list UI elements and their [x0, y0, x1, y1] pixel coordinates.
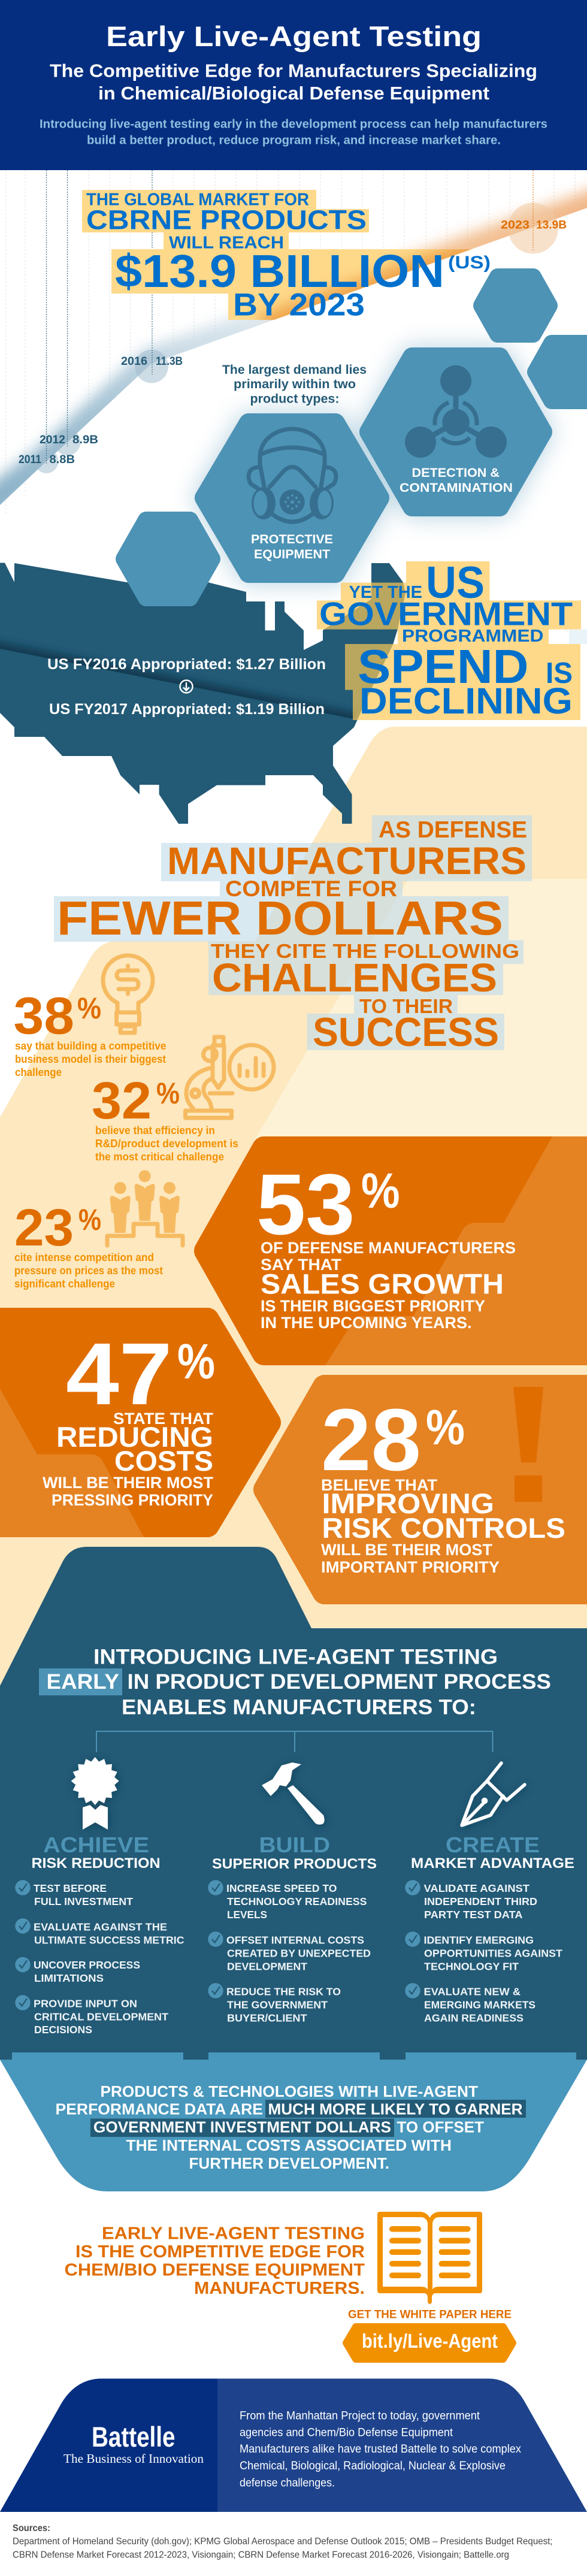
- headline: US government spend declining: US: [426, 557, 485, 607]
- panel: investment callout: [0, 2052, 587, 2191]
- headline: defense manufacturers challenges: COMPETE FOR: [225, 876, 397, 901]
- icon: exclamation mark: [513, 1387, 543, 1502]
- label: DETECTION &: [412, 465, 500, 480]
- checklist: AGAIN READINESS: [424, 2012, 524, 2024]
- panel: 28 percent risk controls: BELIEVE THAT: [321, 1476, 438, 1494]
- stat: 38 percent: [13, 956, 167, 1078]
- headline: global market: WILL REACH: [169, 234, 284, 253]
- checklist: DECISIONS: [34, 2024, 92, 2036]
- icon: microscope: [186, 1037, 274, 1118]
- about text: Chemical, Biological, Radiological, Nuclear & Explosive: [240, 2460, 506, 2472]
- column: create: MARKET ADVANTAGE: [411, 1855, 574, 1871]
- intro text: Introducing live-agent testing early in the development process can help manufacturers: [40, 117, 547, 131]
- checklist: OFFSET INTERNAL COSTS: [226, 1934, 364, 1946]
- panel: 53 percent sales growth: IS THEIR BIGGEST PRIORITY: [261, 1297, 485, 1315]
- hexagon: decorative top right: [482, 277, 549, 334]
- caption: pressure on prices as the most: [14, 1265, 163, 1277]
- column heading: BUILD: [259, 1833, 330, 1857]
- label: PROTECTIVE: [251, 532, 333, 546]
- headline: US government spend declining: DECLINING: [359, 681, 573, 721]
- checklist: THE GOVERNMENT: [227, 1998, 328, 2010]
- logo: Battelle: The Business of Innovation: [63, 2451, 204, 2466]
- chart: CBRNE market growth: [0, 170, 587, 515]
- sources: CBRN Defense Market Forecast 2012-2023, Visiongain; CBRN Defense Market Forecast 2016-2026, Visiongain; Battelle.org: [13, 2550, 509, 2560]
- caption: say that building a competitive: [15, 1040, 167, 1052]
- icon: chemical hazard: [405, 365, 507, 458]
- stat: 32 percent: [92, 1037, 274, 1163]
- headline: US government spend declining: YET THE: [349, 583, 422, 602]
- panel: investment callout: PRODUCTS & TECHNOLOGIES WITH LIVE-AGENT: [101, 2082, 478, 2100]
- stat: 23 percent: [14, 1170, 183, 1290]
- call to action text: [65, 2224, 365, 2298]
- headline: US government spend declining: [317, 557, 587, 721]
- headline: global market: THE GLOBAL MARKET FOR: [86, 191, 309, 210]
- panel: 53 percent sales growth: SAY THAT: [261, 1256, 342, 1274]
- column: achieve: RISK REDUCTION: [31, 1855, 161, 1871]
- icon: pen nib: [462, 1763, 525, 1825]
- call to action text: MANUFACTURERS.: [194, 2279, 365, 2298]
- headline: US government spend declining: GOVERNMENT: [319, 595, 573, 633]
- checklist: DEVELOPMENT: [227, 1960, 307, 1972]
- checklist: FULL INVESTMENT: [34, 1895, 133, 1907]
- data point 2011: 8.8B: [49, 453, 75, 466]
- heading: [39, 1645, 551, 1719]
- about text: From the Manhattan Project to today, government: [240, 2409, 480, 2423]
- panel: 47 percent reducing costs: PRESSING PRIORITY: [52, 1491, 213, 1509]
- panel: 53 percent sales growth: SALES GROWTH: [261, 1268, 504, 1300]
- budget FY2016: US FY2016 Appropriated: $1.27 Billion: [47, 656, 326, 673]
- checklist: OPPORTUNITIES AGAINST: [424, 1947, 562, 1959]
- caption: [14, 1251, 163, 1290]
- checklist: [15, 1880, 184, 2036]
- panel: investment callout: THE INTERNAL COSTS ASSOCIATED WITH: [126, 2136, 452, 2154]
- about text: Manufacturers alike have trusted Battelle to solve complex: [240, 2443, 521, 2456]
- data point 2011: [19, 170, 75, 473]
- logo: Battelle: [63, 2421, 204, 2466]
- about text: defense challenges.: [240, 2477, 335, 2490]
- panel: investment callout: TO OFFSET: [397, 2118, 484, 2136]
- hexagon: protective equipment: EQUIPMENT: [254, 547, 330, 561]
- text: largest demand: product types:: [250, 392, 339, 406]
- caption: R&D/product development is: [95, 1138, 238, 1150]
- panel: introducing live-agent testing: [0, 1547, 587, 2060]
- headline: defense manufacturers challenges: CHALLENGES: [212, 956, 497, 1000]
- background: tan panels: [0, 727, 587, 1695]
- map: United States: [0, 563, 406, 824]
- stat: 32 percent: 32: [92, 1072, 152, 1130]
- panel: investment callout: MUCH MORE LIKELY TO GARNER: [268, 2100, 523, 2118]
- panel: 47 percent reducing costs: COSTS: [114, 1445, 213, 1477]
- headline: defense manufacturers challenges: MANUFACTURERS: [167, 839, 527, 882]
- stat: 23 percent: %: [78, 1203, 101, 1236]
- subtitle: [50, 60, 537, 104]
- stat: 38 percent: 38: [13, 987, 74, 1045]
- panel: 28 percent risk controls: IMPROVING: [322, 1487, 494, 1519]
- checklist: TECHNOLOGY READINESS: [227, 1895, 367, 1907]
- panel: 53 percent sales growth: 53: [256, 1156, 355, 1253]
- heading: EARLY: [47, 1670, 119, 1694]
- data point 2023: 2023: [501, 219, 529, 231]
- data point 2012: 2012: [40, 434, 65, 446]
- headline: global market: BY 2023: [233, 288, 365, 322]
- logo: Battelle: Battelle: [92, 2421, 175, 2453]
- panel: investment callout: GOVERNMENT INVESTMENT DOLLARS: [93, 2118, 391, 2136]
- text: largest demand: [222, 363, 367, 406]
- panel: 28 percent risk controls: %: [426, 1399, 465, 1455]
- checklist: REDUCE THE RISK TO: [226, 1985, 341, 1997]
- hexagon: decorative right: [535, 343, 587, 401]
- hexagon: detection and contamination: CONTAMINATION: [400, 480, 513, 495]
- checklist: EVALUATE AGAINST THE: [34, 1921, 167, 1933]
- panel: 47 percent reducing costs: WILL BE THEIR MOST: [43, 1474, 213, 1492]
- headline: global market: [82, 190, 490, 320]
- checklist: INDEPENDENT THIRD: [424, 1895, 537, 1907]
- call to action text: EARLY LIVE-AGENT TESTING: [102, 2224, 365, 2243]
- headline: US government spend declining: IS: [546, 657, 573, 690]
- checklist: TEST BEFORE: [34, 1882, 107, 1894]
- sources: [13, 2523, 552, 2560]
- heading: IN PRODUCT DEVELOPMENT PROCESS: [127, 1670, 551, 1694]
- button: white paper link: [346, 2327, 513, 2359]
- checklist: PARTY TEST DATA: [424, 1909, 523, 1921]
- heading: INTRODUCING LIVE-AGENT TESTING: [93, 1645, 498, 1669]
- data point 2016: 11.3B: [156, 355, 183, 368]
- panel: 47 percent reducing costs: %: [177, 1334, 215, 1389]
- headline: defense manufacturers challenges: TO THEIR: [359, 995, 453, 1017]
- intro text: [40, 117, 547, 147]
- caption: business model is their biggest: [15, 1053, 166, 1065]
- checklist: LIMITATIONS: [34, 1972, 104, 1984]
- about text: agencies and Chem/Bio Defense Equipment: [240, 2426, 453, 2439]
- checklist: BUYER/CLIENT: [227, 2012, 307, 2024]
- stat: 38 percent: %: [77, 991, 101, 1025]
- text: largest demand: The largest demand lies: [222, 363, 367, 377]
- about text: [240, 2409, 521, 2490]
- headline: defense manufacturers challenges: FEWER DOLLARS: [57, 891, 503, 945]
- hexagon: detection and contamination: [369, 357, 543, 507]
- checklist: UNCOVER PROCESS: [34, 1959, 140, 1971]
- sources: Sources:: [13, 2523, 50, 2533]
- column: create: [405, 1763, 574, 2024]
- checklist: EMERGING MARKETS: [424, 1998, 535, 2010]
- icon: hammer: [262, 1762, 325, 1825]
- panel: 28 percent risk controls: 28: [321, 1391, 421, 1489]
- stat: 23 percent: 23: [14, 1199, 74, 1257]
- headline: defense manufacturers challenges: THEY CITE THE FOLLOWING: [211, 940, 519, 962]
- icon: podium with people: [107, 1170, 183, 1245]
- checklist: CREATED BY UNEXPECTED: [227, 1947, 371, 1959]
- caption: [15, 1040, 167, 1078]
- headline: global market: CBRNE PRODUCTS: [86, 205, 367, 235]
- icon: award ribbon: [71, 1757, 119, 1830]
- caption: [95, 1124, 238, 1163]
- data point 2023: 13.9B: [536, 219, 567, 231]
- checklist: ULTIMATE SUCCESS METRIC: [34, 1934, 184, 1946]
- data point 2016: [121, 170, 183, 383]
- checklist: PROVIDE INPUT ON: [34, 1997, 137, 2009]
- column: build: [208, 1762, 377, 2024]
- panel: investment callout: PERFORMANCE DATA ARE: [55, 2100, 263, 2118]
- column heading: CREATE: [446, 1833, 540, 1857]
- column: build: SUPERIOR PRODUCTS: [212, 1856, 377, 1872]
- icon: gas mask: [249, 429, 336, 522]
- subtitle: in Chemical/Biological Defense Equipment: [98, 83, 489, 104]
- checklist: INCREASE SPEED TO: [226, 1882, 337, 1894]
- stat: 32 percent: %: [156, 1077, 180, 1110]
- panel: 47 percent reducing costs: REDUCING: [56, 1421, 213, 1453]
- headline: global market: $13.9 BILLION: [115, 246, 444, 297]
- checklist: LEVELS: [227, 1909, 267, 1921]
- caption: believe that efficiency in: [95, 1124, 215, 1136]
- icon: down arrow: [180, 681, 193, 693]
- title: Early Live-Agent Testing: [106, 20, 482, 52]
- caption: cite intense competition and: [14, 1251, 154, 1263]
- checklist: CRITICAL DEVELOPMENT: [34, 2010, 168, 2022]
- checklist: IDENTIFY EMERGING: [424, 1934, 534, 1946]
- intro text: build a better product, reduce program risk, and increase market share.: [87, 134, 501, 147]
- data point 2012: [40, 170, 98, 455]
- panel: 28 percent risk controls: WILL BE THEIR MOST: [321, 1541, 492, 1559]
- headline: US government spend declining: PROGRAMMED: [402, 627, 544, 646]
- headline: US government spend declining: SPEND: [358, 640, 528, 693]
- panel: 28 percent risk controls: [265, 1387, 587, 1592]
- panel: 53 percent sales growth: OF DEFENSE MANUFACTURERS: [261, 1239, 516, 1257]
- headline: defense manufacturers challenges: SUCCESS: [313, 1009, 499, 1055]
- checklist: VALIDATE AGAINST: [424, 1882, 529, 1894]
- headline: defense manufacturers challenges: [54, 815, 532, 1055]
- subtitle: The Competitive Edge for Manufacturers Specializing: [50, 60, 537, 81]
- data point 2016: 2016: [121, 355, 147, 368]
- hexagon glow: [193, 347, 553, 583]
- panel: Battelle footer: [0, 2378, 587, 2512]
- sources: Department of Homeland Security (doh.gov); KPMG Global Aerospace and Defense Outlook 2015; OMB – Presidents Budget Request;: [13, 2536, 552, 2547]
- headline: global market: (US): [448, 253, 491, 273]
- data point 2023: [501, 170, 567, 254]
- icon: open book: [377, 2212, 482, 2304]
- white paper label: GET THE WHITE PAPER HERE: [348, 2309, 512, 2321]
- panel: 47 percent reducing costs: STATE THAT: [113, 1410, 214, 1428]
- checklist: [208, 1880, 371, 2024]
- checklist: EVALUATE NEW &: [424, 1985, 521, 1997]
- heading: ENABLES MANUFACTURERS TO:: [122, 1695, 476, 1719]
- checklist: [405, 1880, 562, 2024]
- panel: investment callout: FURTHER DEVELOPMENT.: [189, 2154, 389, 2172]
- hexagon: protective equipment: [204, 423, 380, 573]
- caption: the most critical challenge: [95, 1151, 224, 1163]
- text: largest demand: primarily within two: [234, 377, 356, 391]
- data point 2012: 8.9B: [72, 434, 98, 446]
- call to action text: CHEM/BIO DEFENSE EQUIPMENT: [65, 2261, 365, 2280]
- column: achieve: [15, 1757, 184, 2036]
- panel: header: [0, 0, 587, 170]
- caption: challenge: [15, 1066, 62, 1078]
- call to action text: IS THE COMPETITIVE EDGE FOR: [75, 2242, 365, 2261]
- panel: 28 percent risk controls: RISK CONTROLS: [322, 1512, 565, 1544]
- hexagon: decorative left: [124, 520, 212, 598]
- checklist: TECHNOLOGY FIT: [424, 1960, 519, 1972]
- panel: 53 percent sales growth: IN THE UPCOMING YEARS.: [261, 1314, 472, 1332]
- panel: 47 percent reducing costs: 47: [66, 1325, 173, 1423]
- budget FY2017: US FY2017 Appropriated: $1.19 Billion: [49, 701, 325, 718]
- caption: significant challenge: [14, 1278, 115, 1290]
- column heading: ACHIEVE: [43, 1833, 149, 1857]
- panel: 53 percent sales growth: [206, 1136, 587, 1365]
- icon: light bulb: [103, 956, 153, 1033]
- button: white paper link: bit.ly/Live-Agent: [362, 2330, 498, 2352]
- panel: 53 percent sales growth: %: [361, 1163, 400, 1219]
- data point 2011: 2011: [19, 453, 41, 466]
- headline: defense manufacturers challenges: AS DEFENSE: [379, 817, 527, 843]
- panel: 47 percent reducing costs: [0, 1320, 269, 1537]
- panel: 28 percent risk controls: IMPORTANT PRIORITY: [321, 1558, 500, 1576]
